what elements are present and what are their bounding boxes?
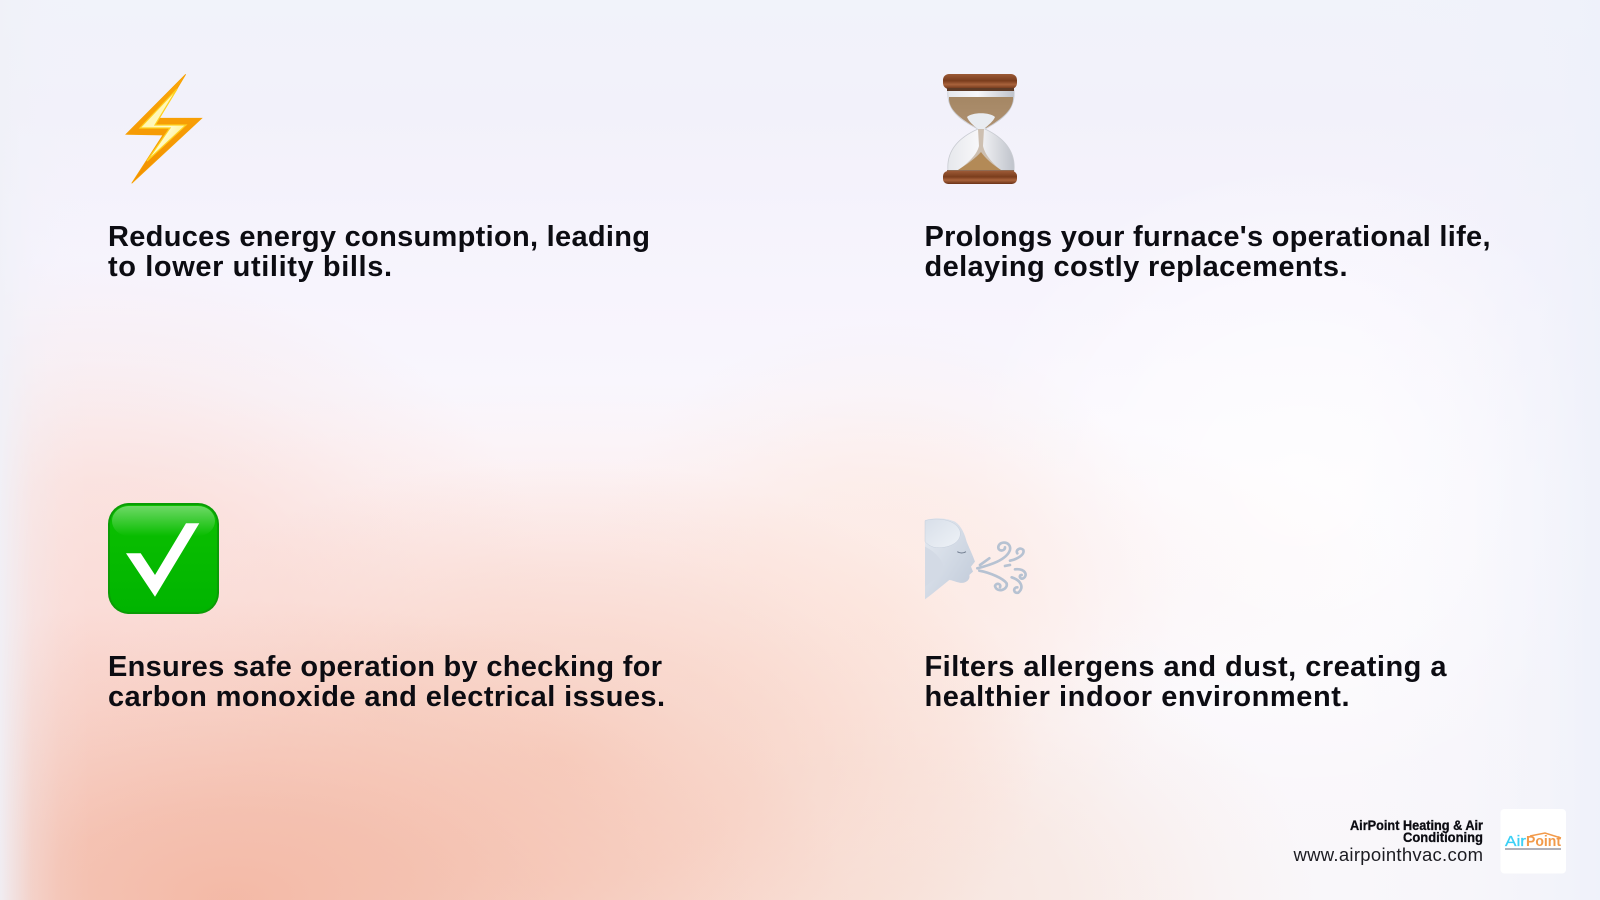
icon: lightning bolt — [126, 74, 202, 183]
text: lifespan benefit: Prolongs your furnace's operational life, — [924, 221, 1490, 253]
text: air quality benefit: Filters allergens and dust, creating a — [924, 651, 1447, 683]
logo badge: Point — [1526, 834, 1561, 850]
text: air quality benefit — [924, 651, 1447, 713]
company name: AirPoint Heating & Air — [1350, 818, 1484, 833]
text: lifespan benefit: delaying costly replacements. — [924, 251, 1348, 283]
text: safety benefit: Ensures safe operation by checking for — [108, 651, 662, 683]
text: air quality benefit: healthier indoor environment. — [924, 681, 1350, 713]
text: energy benefit: to lower utility bills. — [108, 251, 392, 283]
website url: www.airpointhvac.com — [1292, 844, 1483, 865]
company name — [1350, 818, 1484, 845]
icon: check mark button — [108, 503, 219, 614]
text: energy benefit — [108, 221, 650, 283]
icon: wind face — [925, 518, 1026, 599]
logo badge — [1500, 809, 1566, 874]
text: safety benefit: carbon monoxide and electrical issues. — [108, 681, 665, 713]
text: energy benefit: Reduces energy consumption, leading — [108, 221, 650, 253]
logo badge: Air — [1505, 834, 1526, 850]
text: lifespan benefit — [924, 221, 1490, 283]
text: safety benefit — [108, 651, 665, 713]
icon: hourglass — [943, 74, 1017, 184]
company name: Conditioning — [1403, 830, 1483, 845]
